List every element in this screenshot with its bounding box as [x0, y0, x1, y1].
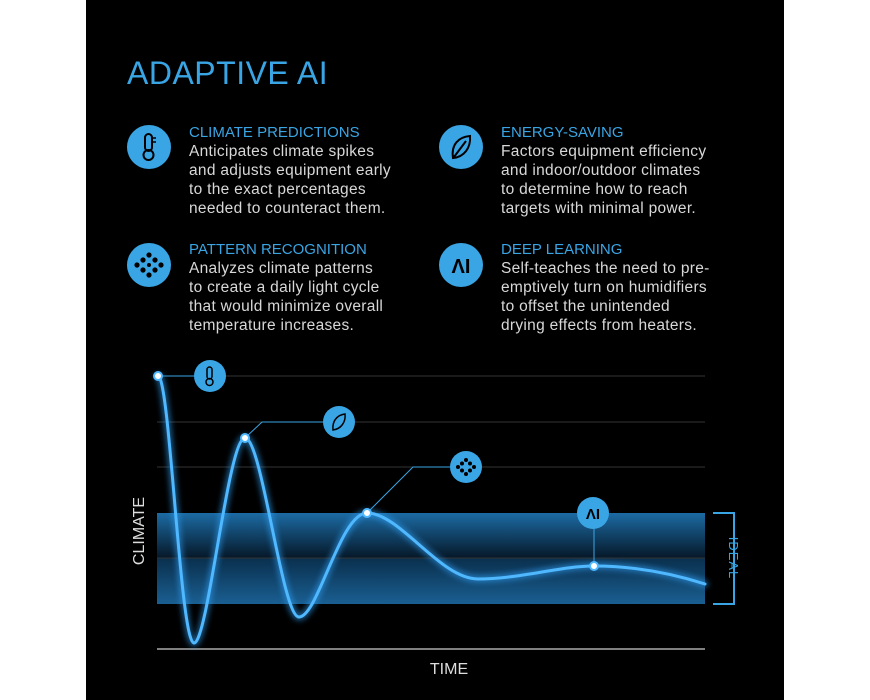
heading: ENERGY-SAVING — [501, 124, 624, 141]
body text: Analyzes climate patterns — [189, 260, 373, 277]
icon: thermometer — [127, 125, 171, 169]
ideal bracket — [713, 513, 741, 604]
body text: targets with minimal power. — [501, 200, 696, 217]
leader lines — [158, 376, 594, 566]
body text: Factors equipment efficiency — [501, 143, 706, 160]
chart — [131, 360, 741, 678]
heading: CLIMATE PREDICTIONS — [189, 124, 360, 141]
data points — [154, 372, 598, 570]
body text: to offset the unintended — [501, 298, 670, 315]
icon: pattern — [127, 243, 171, 287]
ideal band — [157, 513, 705, 604]
y-axis label: CLIMATE — [131, 497, 148, 565]
ideal bracket: IDEAL — [726, 537, 741, 579]
icon: AI — [439, 243, 483, 287]
icon markers — [194, 360, 609, 529]
feature: pattern recognition — [127, 241, 383, 334]
body text: to determine how to reach — [501, 181, 688, 198]
feature: deep learning — [439, 241, 710, 334]
heading: PATTERN RECOGNITION — [189, 241, 367, 258]
climate curve — [158, 376, 705, 643]
body text: that would minimize overall — [189, 298, 383, 315]
body text: and adjusts equipment early — [189, 162, 391, 179]
heading: DEEP LEARNING — [501, 241, 622, 258]
icon: leaf — [439, 125, 483, 169]
body text: to the exact percentages — [189, 181, 366, 198]
feature: energy-saving — [439, 124, 706, 217]
body text: temperature increases. — [189, 317, 354, 334]
body text: Self-teaches the need to pre- — [501, 260, 710, 277]
title: ADAPTIVE AI — [127, 55, 328, 91]
feature: climate predictions — [127, 124, 391, 217]
body text: emptively turn on humidifiers — [501, 279, 707, 296]
body text: to create a daily light cycle — [189, 279, 379, 296]
icon: AI: ΛI — [452, 256, 470, 278]
body text: drying effects from heaters. — [501, 317, 697, 334]
x-axis label: TIME — [430, 661, 468, 678]
body text: Anticipates climate spikes — [189, 143, 374, 160]
body text: and indoor/outdoor climates — [501, 162, 700, 179]
body text: needed to counteract them. — [189, 200, 386, 217]
icon markers: ΛI — [586, 506, 600, 523]
